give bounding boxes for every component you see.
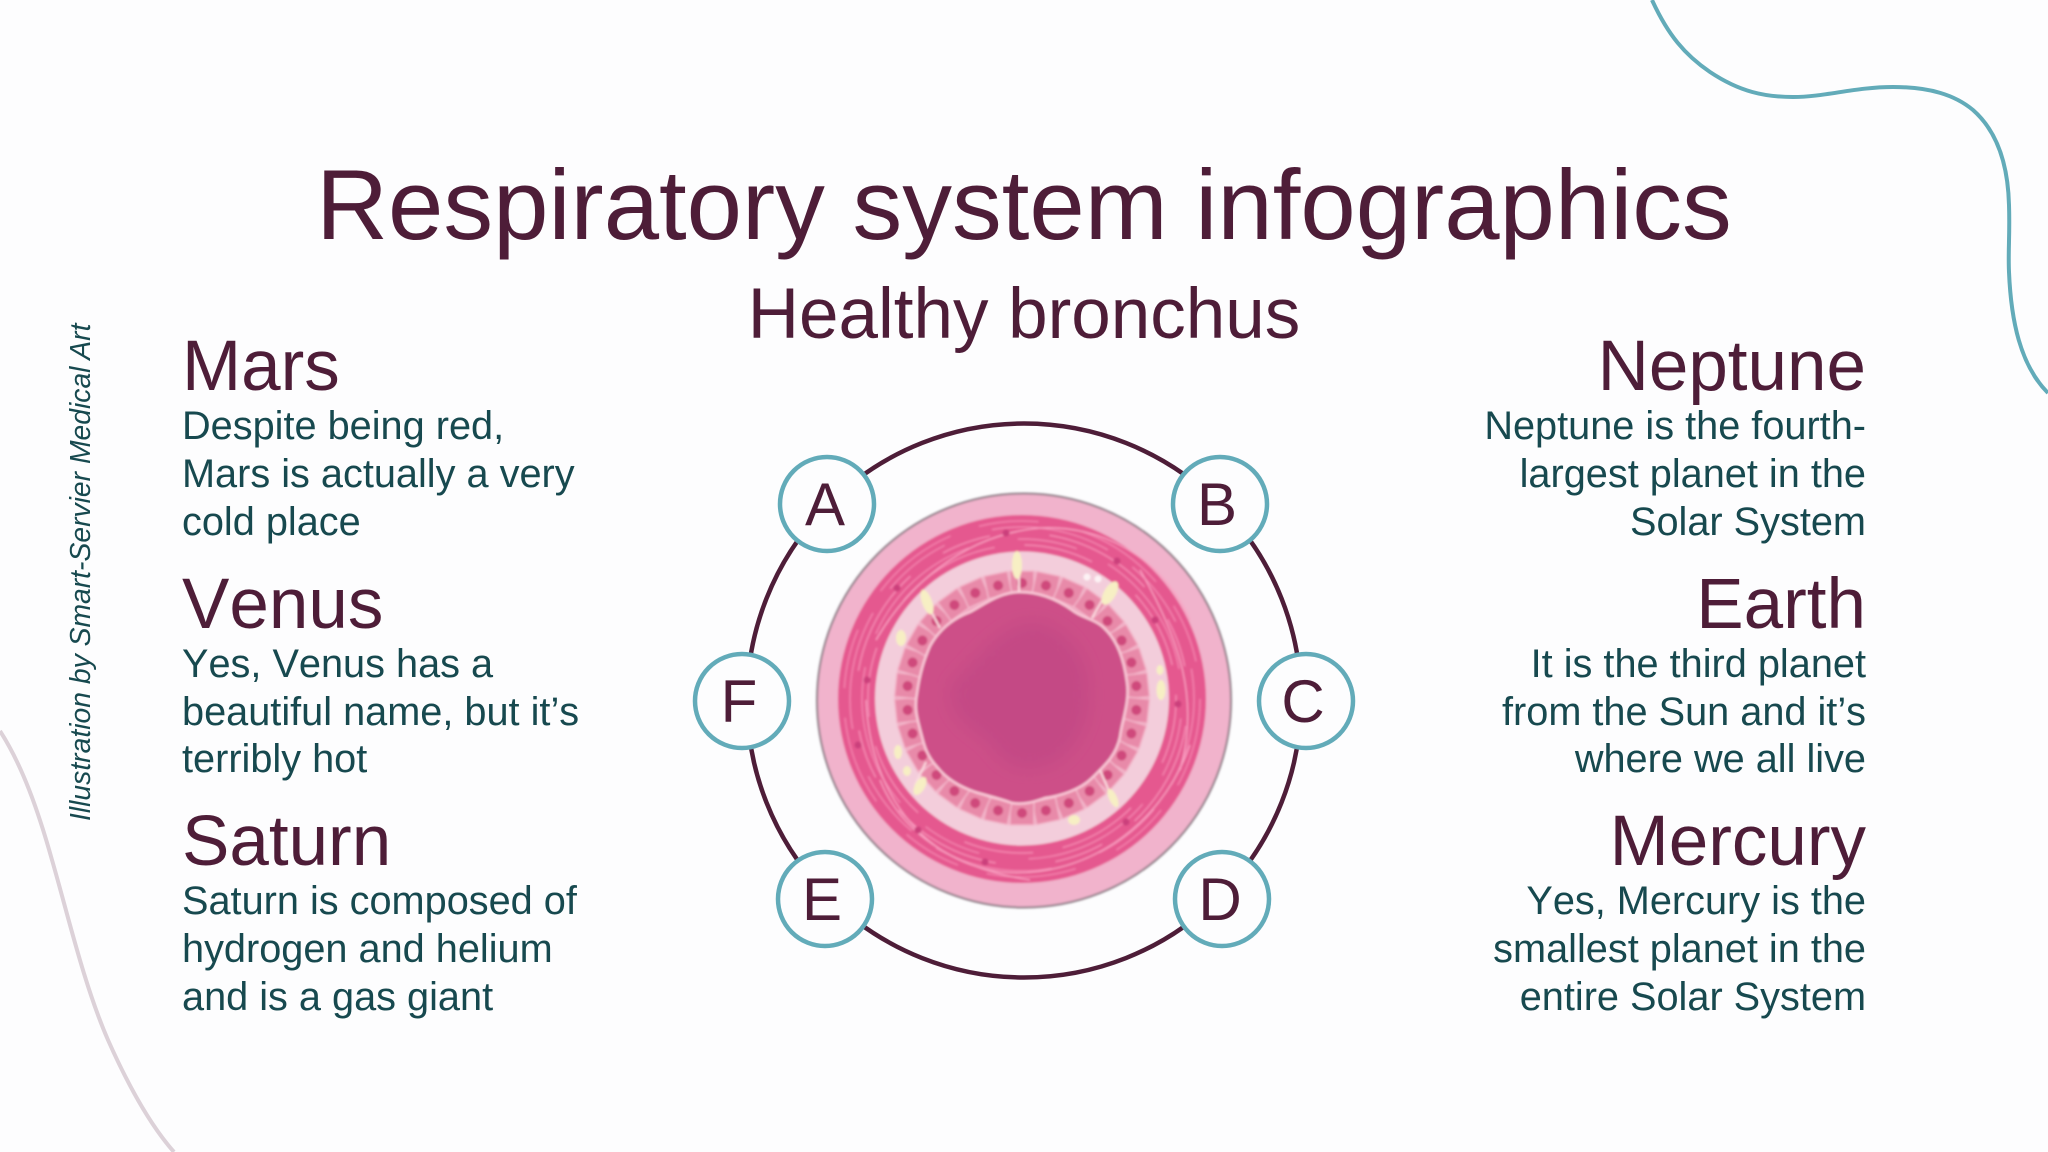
badge D: D [1198,866,1242,933]
block: Neptune [1484,327,1866,544]
title: Respiratory system infographics [316,150,1732,261]
block: Mercury [1493,802,1866,1019]
block: Venus [182,565,579,781]
block: Neptune: Solar System [1630,500,1866,544]
badge A: A [805,471,845,538]
badge B [1173,457,1267,551]
block: Saturn: Saturn is composed of [182,879,578,923]
block: Mercury: smallest planet in the [1493,927,1866,971]
subtitle: Healthy bronchus [748,275,1300,354]
block: Mars: cold place [182,500,361,544]
block: Saturn: and is a gas giant [182,975,493,1019]
adventitia outer layer [817,494,1231,908]
block: Earth: Earth [1696,565,1866,644]
lumen [916,592,1128,804]
block: Neptune: Neptune is the fourth- [1484,404,1866,448]
block: Earth: from the Sun and it’s [1502,690,1866,734]
block: Mars: Mars is actually a very [182,452,575,496]
block: Venus: terribly hot [182,737,367,781]
badge E [778,852,872,946]
gland ducts and secretions [894,551,1166,825]
block: Mercury: Yes, Mercury is the [1526,879,1866,923]
block: Mercury: Mercury [1610,802,1866,881]
block: Neptune: Neptune [1598,327,1866,406]
block: Mars: Mars [182,327,340,406]
block: Mars [182,327,575,544]
block: Neptune: largest planet in the [1520,452,1866,496]
epithelial cell ring [894,571,1150,825]
badge C: C [1281,668,1325,735]
outer ring [747,424,1301,978]
block: Earth [1502,565,1866,781]
block: Venus: Venus [182,565,383,644]
block: Mars: Despite being red, [182,404,504,448]
badge A [780,457,874,551]
decorative curve: bottom left [0,731,174,1152]
decorative curve: top right [1652,0,2048,393]
block: Mercury: entire Solar System [1520,975,1866,1019]
muscle layer [780,457,1264,941]
block: Venus: beautiful name, but it’s [182,690,579,734]
block: Saturn: hydrogen and helium [182,927,553,971]
bronchus illustration [780,457,1264,941]
right column: planets [1484,327,1866,1019]
block: Earth: It is the third planet [1531,642,1866,686]
block: Saturn: Saturn [182,802,391,881]
badge D [1175,852,1269,946]
badge C [1259,654,1353,748]
illustration credit: Illustration by Smart-Servier Medical Art [64,322,96,821]
badge B: B [1197,471,1237,538]
badge F: F [721,668,757,735]
left column: planets [182,327,579,1019]
block: Venus: Yes, Venus has a [182,642,494,686]
badge F [695,654,789,748]
pale connective ring [875,552,1169,846]
block: Saturn [182,802,578,1019]
block: Earth: where we all live [1574,737,1866,781]
lumen shadow blotch [949,622,1090,770]
badge E: E [802,866,842,933]
